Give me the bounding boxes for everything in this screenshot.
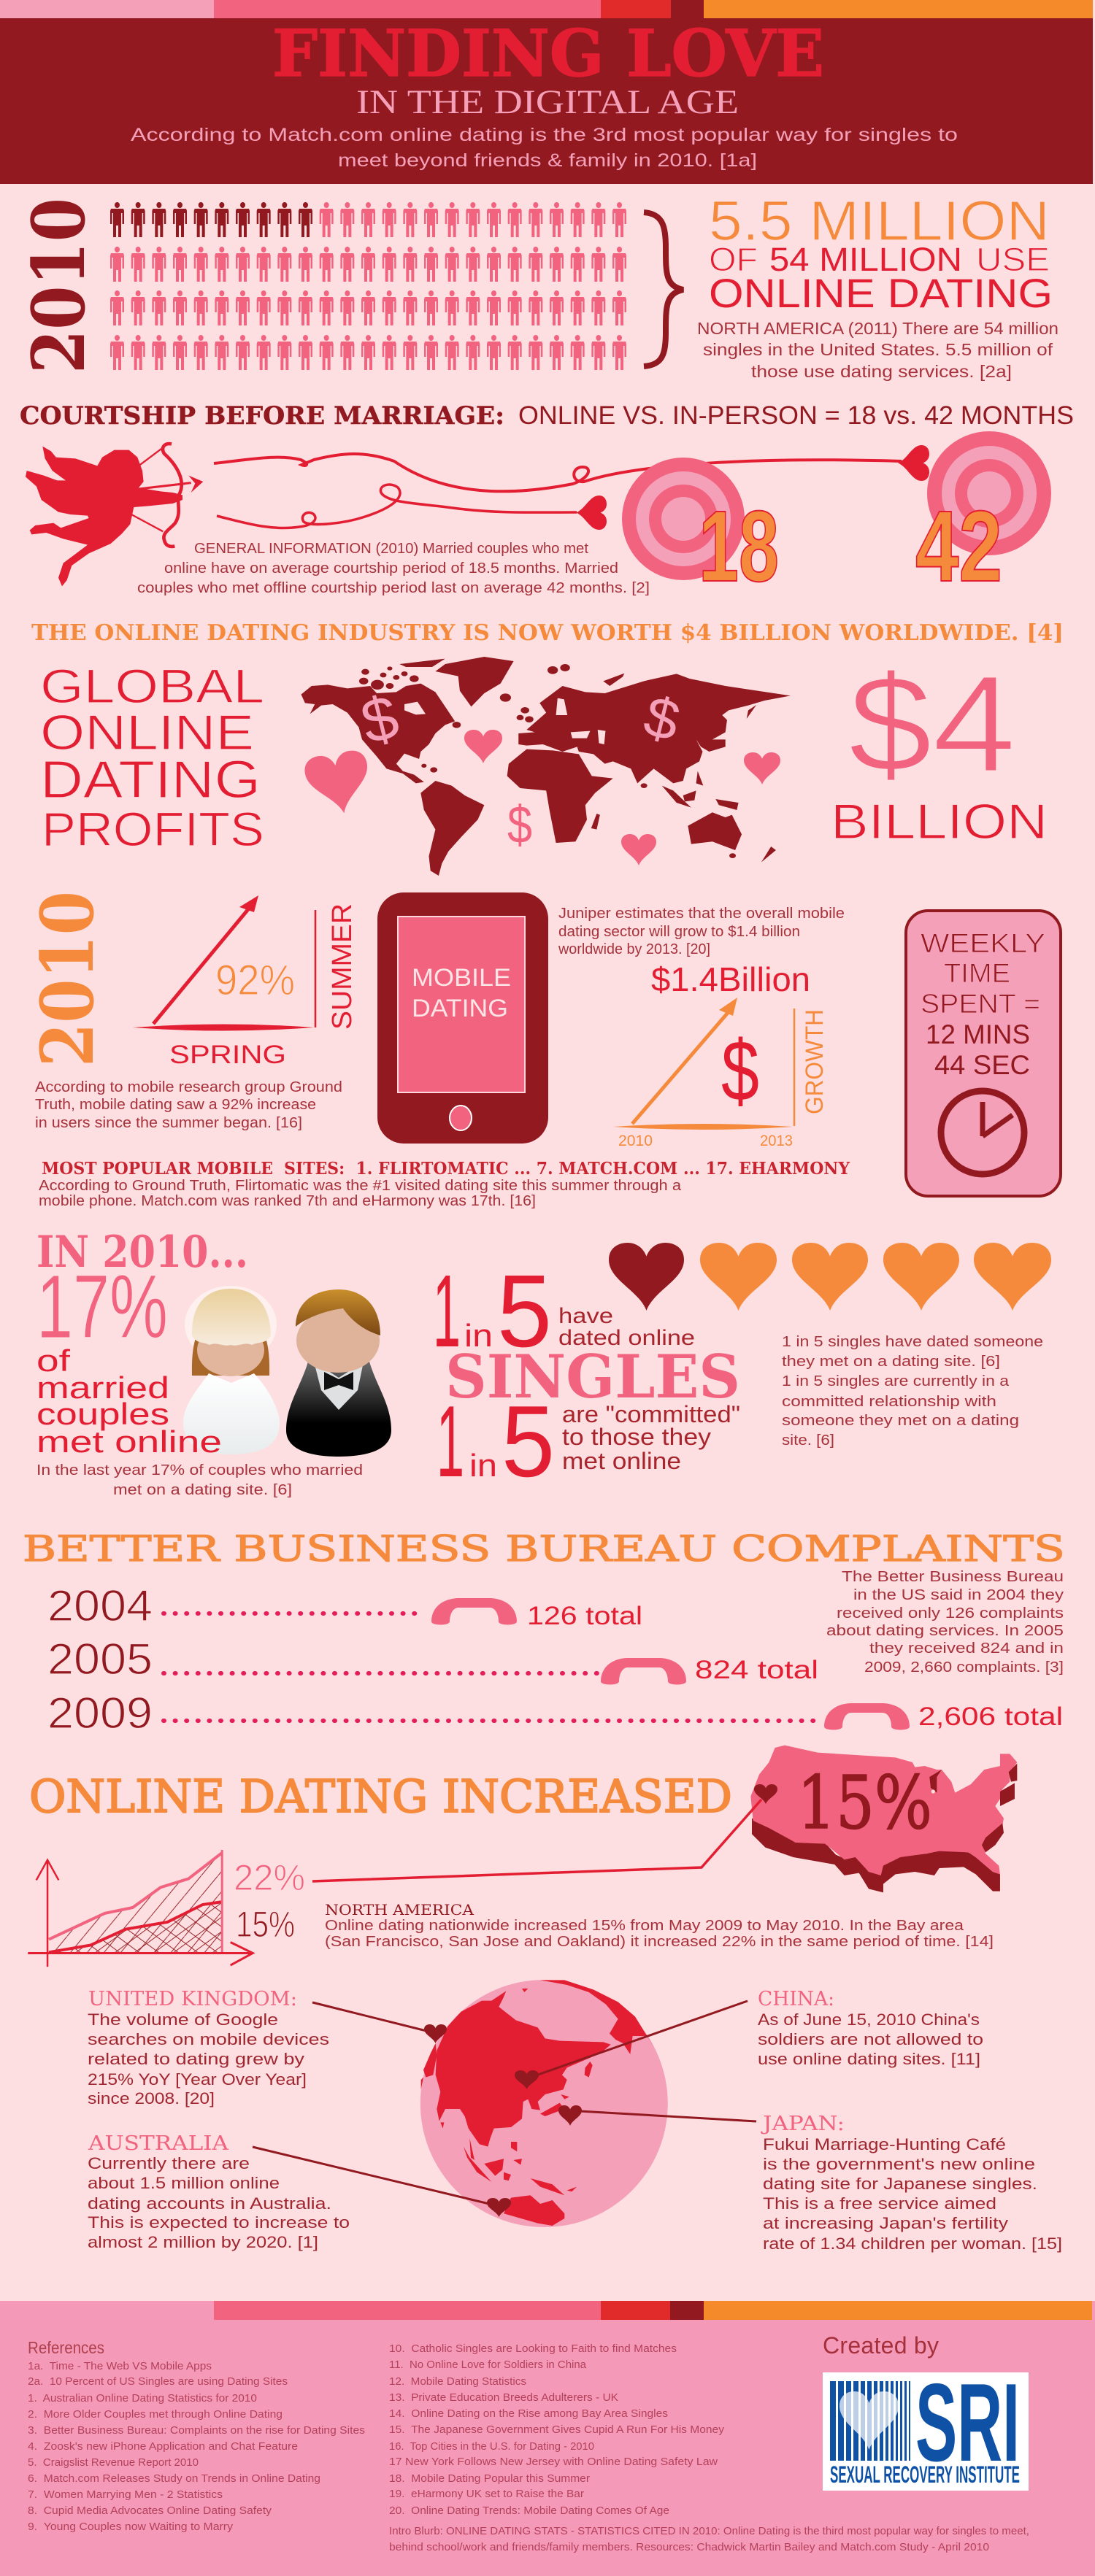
singles note: 1 in 5 singles have dated someone — [782, 1334, 1043, 1350]
married note: In the last year 17% of couples who married — [36, 1462, 363, 1478]
heart arrowhead bottom — [576, 495, 607, 530]
references column 2: behind school/work and friends/family members. Resources: Chadwick Martin Bailey and Match.com Study - April 2010 — [389, 2541, 989, 2553]
references column 1: 2. More Older Couples met through Online Dating — [28, 2408, 283, 2421]
phone: MOBILE — [412, 964, 511, 992]
1 in 5 committed: in — [469, 1448, 497, 1484]
icon: groom — [286, 1289, 391, 1457]
years: 2004 — [47, 1581, 153, 1630]
global online dating profits: PROFITS — [42, 802, 264, 856]
growth chart: $ — [721, 1023, 759, 1119]
of married couples met online — [36, 1343, 222, 1459]
globe — [420, 1980, 668, 2227]
people pictogram grid — [110, 202, 626, 370]
global online dating profits: ONLINE — [40, 705, 254, 760]
of married couples met online: couples — [36, 1397, 169, 1431]
chart labels: 22% — [234, 1857, 305, 1898]
references column 1 — [28, 2360, 365, 2533]
growth chart: 2010 — [618, 1133, 653, 1149]
singles note — [782, 1334, 1043, 1449]
most popular mobile sites: MOST POPULAR MOBILE SITES: 1. FLIRTOMATIC ... 7. MATCH.COM ... 17. EHARMONY — [42, 1159, 850, 1179]
bbb note: The Better Business Bureau — [842, 1569, 1064, 1585]
north america note: Online dating nationwide increased 15% from May 2009 to May 2010. In the Bay area — [325, 1918, 964, 1934]
weekly time card: 12 MINS — [926, 1019, 1030, 1049]
years: 2005 — [47, 1635, 153, 1684]
growth line chart — [28, 1850, 253, 1967]
spring to summer chart: SUMMER — [327, 903, 358, 1030]
icon: bride — [183, 1286, 280, 1454]
title: FINDING LOVE — [272, 15, 824, 91]
north america note — [697, 319, 1058, 381]
references column 2: 12. Mobile Dating Statistics — [389, 2375, 526, 2388]
flirtomatic note — [39, 1178, 682, 1209]
growth chart: GROWTH — [801, 1009, 829, 1114]
of 54 million use: 54 MILLION — [769, 241, 962, 278]
1 in 5 committed: to those they — [562, 1424, 711, 1450]
section: global profits — [31, 620, 1064, 876]
bbb note: in the US said in 2004 they — [853, 1587, 1064, 1603]
references column 1: 9. Young Couples now Waiting to Marry — [28, 2521, 234, 2533]
ground truth note: in users since the summer began. [16] — [35, 1115, 302, 1131]
references heading: References — [28, 2338, 104, 2357]
section: courtship — [20, 401, 1074, 603]
australia: This is expected to increase to — [88, 2213, 350, 2232]
1 in 5 committed: are "committed" — [562, 1401, 740, 1427]
increased heading: ONLINE DATING INCREASED — [29, 1770, 732, 1823]
australia: AUSTRALIA — [88, 2132, 229, 2155]
bbb note: about dating services. In 2005 — [826, 1623, 1064, 1639]
references column 2: 10. Catholic Singles are Looking to Faith to find Matches — [389, 2342, 677, 2355]
1 in 5 committed: 5 — [502, 1385, 555, 1498]
united kingdom: 215% YoY [Year Over Year] — [88, 2070, 307, 2089]
icon: telephone handsets — [431, 1598, 910, 1729]
subtitle: IN THE DIGITAL AGE — [356, 83, 739, 121]
references column 2: 18. Mobile Dating Popular this Summer — [389, 2472, 590, 2485]
of married couples met online: met online — [36, 1424, 222, 1459]
1 in 5 committed: 1 — [437, 1385, 464, 1498]
1 in 5 have dated: dated online — [558, 1326, 695, 1350]
big number: 5.5 MILLION — [709, 190, 1050, 252]
brace — [644, 212, 683, 366]
references column 1: 1. Australian Online Dating Statistics for 2010 — [28, 2392, 257, 2405]
totals — [527, 1602, 1063, 1731]
united kingdom: since 2008. [20] — [88, 2089, 215, 2108]
references column 2: 15. The Japanese Government Gives Cupid A Run For His Money — [389, 2423, 725, 2436]
weekly time card: TIME — [944, 958, 1010, 988]
references column 1: 6. Match.com Releases Study on Trends in Online Dating — [28, 2472, 320, 2485]
references column 1: 2a. 10 Percent of US Singles are using Dating Sites — [28, 2375, 288, 2388]
1 in 5 have dated — [433, 1253, 695, 1368]
references column 1: 7. Women Marrying Men - 2 Statistics — [28, 2488, 223, 2501]
of married couples met online: married — [36, 1370, 169, 1405]
north america note: NORTH AMERICA — [325, 1901, 474, 1918]
bbb note — [826, 1569, 1064, 1675]
references column 2: 17 New York Follows New Jersey with Online Dating Safety Law — [389, 2456, 718, 2468]
target 2 — [927, 431, 1051, 555]
juniper note: Juniper estimates that the overall mobile — [558, 906, 845, 922]
bbb note: received only 126 complaints — [837, 1605, 1064, 1621]
ground truth note — [35, 1079, 342, 1131]
section: world stories — [88, 1980, 1062, 2253]
spring to summer chart: SPRING — [169, 1041, 286, 1069]
general information note: online have on average courtship period of 18.5 months. Married — [164, 560, 618, 576]
courtship heading: ONLINE VS. IN-PERSON = 18 vs. 42 MONTHS — [518, 401, 1074, 430]
references column 2: 20. Online Dating Trends: Mobile Dating Comes Of Age — [389, 2504, 669, 2517]
united kingdom: The volume of Google — [88, 2010, 278, 2029]
section: online dating increased — [28, 1746, 1017, 1967]
courtship heading: COURTSHIP BEFORE MARRIAGE: — [20, 401, 504, 431]
world map — [301, 657, 791, 876]
target 1 — [622, 458, 745, 580]
logo: sexual recovery institute: SRI — [915, 2361, 1020, 2485]
japan — [761, 2113, 1062, 2253]
references column 1: 5. Craigslist Revenue Report 2010 — [28, 2456, 199, 2469]
growth chart: 2013 — [760, 1133, 793, 1149]
phone: DATING — [412, 995, 508, 1022]
footer panel — [0, 2301, 1095, 2576]
in 2010: IN 2010... — [36, 1227, 248, 1278]
australia: about 1.5 million online — [88, 2174, 280, 2192]
japan: JAPAN: — [761, 2113, 845, 2135]
four dollars: $4 — [848, 647, 1016, 801]
spring to summer chart — [133, 895, 358, 1069]
references column 1: 4. Zoosk's new iPhone Application and Chat Feature — [28, 2440, 298, 2453]
section: mobile dating — [26, 891, 1061, 1209]
married note — [36, 1462, 363, 1498]
general information note: couples who met offline courtship period last on average 42 months. [2] — [137, 580, 650, 596]
global online dating profits — [40, 659, 264, 856]
fifteen percent on map: 15% — [797, 1760, 932, 1846]
references column 1: 3. Better Business Bureau: Complaints on the rise for Dating Sites — [28, 2424, 365, 2437]
ribbon arrow to 18 — [217, 485, 577, 528]
flirtomatic note: mobile phone. Match.com was ranked 7th and eHarmony was 17th. [16] — [39, 1193, 536, 1209]
growth chart: $1.4Billion — [651, 960, 810, 998]
year 2010 vertical: 2010 — [17, 198, 101, 374]
japan: Fukui Marriage-Hunting Café — [763, 2135, 1006, 2153]
number 18: 18 — [699, 490, 779, 603]
weekly time card — [906, 911, 1061, 1196]
australia: Currently there are — [88, 2154, 250, 2172]
seventeen percent: 17% — [36, 1257, 168, 1357]
dollar signs on map: $ — [638, 683, 686, 754]
chart labels: 15% — [236, 1904, 295, 1945]
dollar signs on map: $ — [355, 682, 405, 757]
heart arrowhead top — [898, 445, 929, 481]
icon: cupid — [26, 444, 203, 586]
north america note: singles in the United States. 5.5 million of — [703, 340, 1053, 359]
united kingdom: related to dating grew by — [88, 2050, 304, 2068]
five hearts — [609, 1243, 1051, 1311]
china: CHINA: — [758, 1988, 834, 2010]
industry heading: THE ONLINE DATING INDUSTRY IS NOW WORTH $4 BILLION WORLDWIDE. [4] — [31, 620, 1064, 646]
references column 1: 8. Cupid Media Advocates Online Dating Safety — [28, 2504, 272, 2517]
references column 2: 13. Private Education Breeds Adulterers - UK — [389, 2391, 618, 2404]
icon: heart on bay area — [754, 1784, 777, 1804]
year 2010 orange: 2010 — [26, 891, 110, 1067]
1 in 5 have dated: have — [558, 1304, 613, 1328]
references column 2 — [389, 2342, 1029, 2553]
bbb heading: BETTER BUSINESS BUREAU COMPLAINTS — [23, 1528, 1065, 1570]
north america note: (San Francisco, San Jose and Oakland) it increased 22% in the same period of time. [14] — [325, 1934, 994, 1950]
created by: Created by — [823, 2332, 939, 2359]
references column 2: 14. Online Dating on the Rise among Bay Area Singles — [389, 2407, 668, 2420]
growth chart — [613, 960, 829, 1149]
singles note: site. [6] — [782, 1432, 834, 1449]
weekly time card: 44 SEC — [934, 1050, 1030, 1080]
weekly time card: SPENT = — [921, 989, 1040, 1019]
intro text: meet beyond friends & family in 2010. [1a] — [338, 150, 757, 171]
intro text: According to Match.com online dating is the 3rd most popular way for singles to — [131, 125, 958, 145]
japan: This is a free service aimed — [763, 2194, 996, 2213]
dotted bars — [164, 1613, 817, 1721]
dollar signs on map: $ — [507, 796, 532, 855]
juniper note — [558, 906, 845, 957]
australia — [88, 2132, 350, 2251]
totals: 824 total — [695, 1656, 818, 1684]
years — [47, 1581, 153, 1738]
singles: SINGLES — [445, 1343, 740, 1412]
china: use online dating sites. [11] — [758, 2050, 980, 2068]
online dating: ONLINE DATING — [709, 270, 1053, 316]
china — [758, 1988, 983, 2068]
singles note: 1 in 5 singles are currently in a — [782, 1373, 1010, 1389]
hearts around map — [302, 730, 780, 865]
of 54 million use: USE — [976, 241, 1050, 278]
1 in 5 committed: met online — [562, 1448, 681, 1474]
usa map — [750, 1746, 1017, 1892]
japan: dating site for Japanese singles. — [763, 2175, 1037, 2193]
china: As of June 15, 2010 China's — [758, 2010, 980, 2029]
australia: almost 2 million by 2020. [1] — [88, 2233, 318, 2251]
of 54 million use: OF — [709, 241, 758, 278]
japan: is the government's new online — [763, 2155, 1035, 2173]
weekly time card: WEEKLY — [921, 928, 1045, 958]
juniper note: worldwide by 2013. [20] — [558, 941, 710, 957]
section: better business bureau — [23, 1528, 1065, 1738]
japan: rate of 1.34 children per woman. [15] — [763, 2234, 1062, 2253]
section: 5.5 million of 54 million — [17, 190, 1058, 381]
phone — [377, 892, 548, 1144]
references column 2: 19. eHarmony UK set to Raise the Bar — [389, 2488, 584, 2500]
number 42: 42 — [915, 490, 1002, 603]
connector lines — [253, 2001, 756, 2204]
ribbon arrow to 42 — [214, 454, 902, 491]
australia: dating accounts in Australia. — [88, 2194, 331, 2213]
north america note — [325, 1901, 994, 1950]
united kingdom — [88, 1988, 329, 2108]
united kingdom: UNITED KINGDOM: — [88, 1988, 297, 2010]
of married couples met online: of — [36, 1343, 70, 1378]
courtship heading — [20, 401, 1074, 431]
married note: met on a dating site. [6] — [113, 1482, 292, 1498]
bbb note: they received 824 and in — [869, 1640, 1064, 1657]
ground truth note: Truth, mobile dating saw a 92% increase — [35, 1097, 316, 1113]
references column 2: 16. Top Cities in the U.S. for Dating - 2010 — [389, 2440, 594, 2453]
north america note: NORTH AMERICA (2011) There are 54 million — [697, 319, 1058, 338]
global online dating profits: DATING — [40, 751, 261, 809]
icon: location hearts — [424, 2024, 582, 2217]
totals: 126 total — [527, 1602, 642, 1630]
dollar signs on map — [355, 682, 686, 855]
totals: 2,606 total — [918, 1702, 1063, 1731]
references column 1: 1a. Time - The Web VS Mobile Apps — [28, 2360, 212, 2372]
header panel — [0, 0, 1093, 184]
logo: sexual recovery institute — [823, 2361, 1029, 2491]
1 in 5 have dated: 5 — [497, 1253, 552, 1368]
north america note: those use dating services. [2a] — [751, 362, 1012, 381]
general information note: GENERAL INFORMATION (2010) Married couples who met — [194, 541, 588, 557]
intro text — [131, 125, 958, 171]
chart labels — [234, 1857, 305, 1945]
1 in 5 have dated: 1 — [433, 1253, 461, 1368]
japan: at increasing Japan's fertility — [763, 2214, 1008, 2232]
bbb note: 2009, 2,660 complaints. [3] — [864, 1659, 1064, 1675]
1 in 5 have dated: in — [464, 1318, 493, 1354]
singles note: committed relationship with — [782, 1394, 996, 1410]
1 in 5 committed — [437, 1385, 740, 1498]
ground truth note: According to mobile research group Ground — [35, 1079, 342, 1095]
juniper note: dating sector will grow to $1.4 billion — [558, 924, 800, 940]
connector line — [312, 1800, 761, 1881]
billion: BILLION — [831, 794, 1048, 849]
singles note: they met on a dating site. [6] — [782, 1354, 1000, 1370]
of 54 million use — [709, 241, 1050, 278]
references column 2: 11. No Online Love for Soldiers in China — [389, 2359, 587, 2371]
references column 2: Intro Blurb: ONLINE DATING STATS - STATISTICS CITED IN 2010: Online Dating is the third most popular way for singles to meet, — [389, 2525, 1029, 2537]
section: 2010 couples and singles — [36, 1227, 1051, 1498]
flirtomatic note: According to Ground Truth, Flirtomatic was the #1 visited dating site this summer through a — [39, 1178, 682, 1194]
years: 2009 — [47, 1689, 153, 1738]
singles note: someone they met on a dating — [782, 1413, 1019, 1429]
china: soldiers are not allowed to — [758, 2030, 983, 2048]
icon: clock — [941, 1091, 1024, 1174]
global online dating profits: GLOBAL — [40, 659, 264, 713]
united kingdom: searches on mobile devices — [88, 2030, 329, 2048]
spring to summer chart: 92% — [215, 957, 295, 1004]
general information note — [137, 541, 650, 596]
